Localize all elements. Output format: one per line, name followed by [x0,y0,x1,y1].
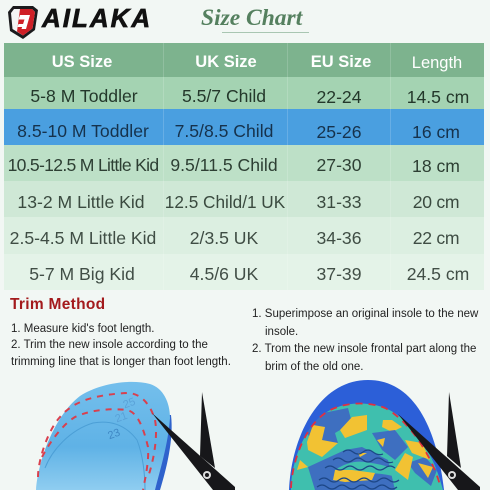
row: 5-8 M Toddler: 22-24 [316,87,362,107]
insole shape [36,382,172,490]
row: 10.5-12.5 M Little Kid: 18 cm [412,156,460,176]
text: right instructions: 2. Trom the new insole frontal part along the [252,343,476,355]
row: 8.5-10 M Toddler: 16 cm [412,122,460,142]
table header row: EU Size [311,53,371,71]
row: 2.5-4.5 M Little Kid: 22 cm [413,228,459,248]
size table [4,43,484,290]
row: 10.5-12.5 M Little Kid: 27-30 [316,155,362,175]
illustration: blue insole with trim lines [36,382,235,490]
icon: logo shield [8,6,38,39]
table header row: US Size [52,53,112,71]
row: 5-8 M Toddler: 5.5/7 Child [182,86,266,106]
row: 2.5-4.5 M Little Kid: 34-36 [316,228,362,248]
row: 5-7 M Big Kid: 4.5/6 UK [190,264,258,284]
row: 5-7 M Big Kid: 37-39 [316,264,362,284]
row: 10.5-12.5 M Little Kid [4,145,484,181]
logo wordmark: AILAKA [42,3,152,33]
panel: trim method left [10,296,231,368]
panel: trim method right [252,308,478,373]
row: 2.5-4.5 M Little Kid: 2/3.5 UK [190,228,258,248]
text: right instructions [252,308,478,373]
row: 10.5-12.5 M Little Kid: 9.5/11.5 Child [170,155,278,175]
row: 5-7 M Big Kid: 24.5 cm [407,264,469,284]
text: left instructions: trimming line that is longer than foot length. [11,356,231,368]
row: 5-7 M Big Kid: 5-7 M Big Kid [29,264,135,284]
row: 10.5-12.5 M Little Kid: 10.5-12.5 M Little Kid [8,155,158,175]
camo insole [291,404,443,490]
row: 8.5-10 M Toddler [4,109,484,145]
title underline [222,32,309,33]
text: right instructions: brim of the old one. [265,361,363,373]
table header row: Length [412,54,462,72]
text: left instructions [11,323,231,368]
row: 8.5-10 M Toddler: 8.5-10 M Toddler [17,121,149,141]
text: left instructions: 1. Measure kid's foot length. [11,323,154,335]
row: 2.5-4.5 M Little Kid [4,217,484,254]
trim line [291,404,440,488]
row: 13-2 M Little Kid [4,181,484,217]
illustration: camo insole over blue insole [289,380,480,490]
row: 13-2 M Little Kid: 12.5 Child/1 UK [165,192,285,212]
row: 8.5-10 M Toddler: 7.5/8.5 Child [175,121,273,141]
row: 2.5-4.5 M Little Kid: 2.5-4.5 M Little Kid [10,228,156,248]
logo: Ailaka [8,3,152,39]
row: 8.5-10 M Toddler: 25-26 [316,122,362,142]
title: Size Chart [201,5,302,31]
row: 5-8 M Toddler: 5-8 M Toddler [30,86,138,106]
table header row: UK Size [195,53,257,71]
row: 13-2 M Little Kid: 13-2 M Little Kid [17,192,145,212]
row: 13-2 M Little Kid: 20 cm [413,192,459,212]
row: 5-7 M Big Kid [4,254,484,290]
insole shape: 21 [114,410,129,425]
row: 5-8 M Toddler [4,77,484,109]
insole shape: 25 [122,396,137,411]
text: left instructions: 2. Trim the new insole according to the [11,339,208,351]
scissors [152,392,235,490]
scissors [398,392,480,490]
text: right instructions: insole. [265,326,298,338]
table header row [4,43,484,77]
row: 5-8 M Toddler: 14.5 cm [407,87,469,107]
text: right instructions: 1. Superimpose an original insole to the new [252,308,478,320]
blue insole [289,380,444,490]
row: 13-2 M Little Kid: 31-33 [316,192,362,212]
insole shape: 23 [106,427,122,442]
heading: Trim Method: Trim Method [10,296,105,313]
